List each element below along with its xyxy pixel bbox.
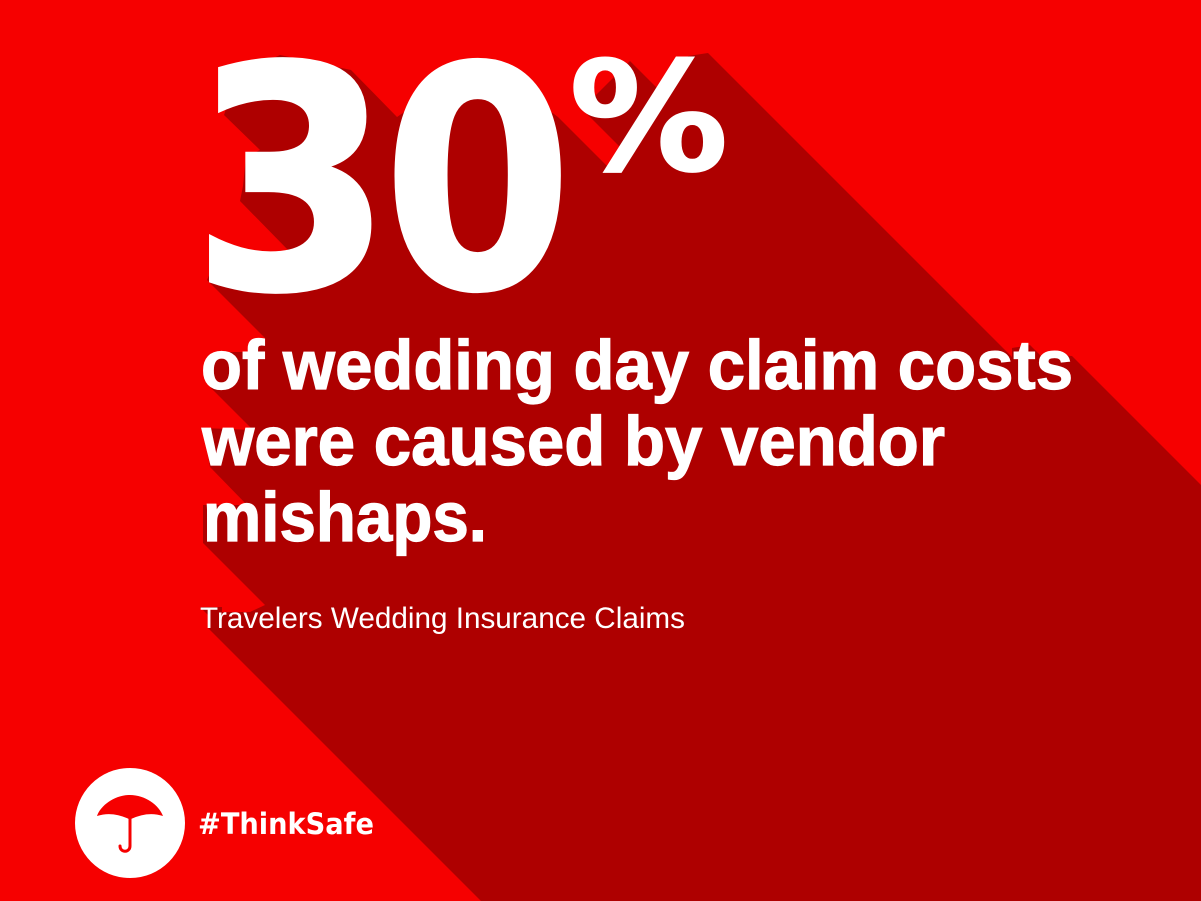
big statistic: 30% [191, 2, 728, 361]
big statistic: 30%: 3 [191, 2, 393, 361]
hashtag: #ThinkSafe [198, 807, 374, 841]
big statistic: 30%: 0 [382, 2, 573, 361]
headline text: of wedding day claim costs [201, 326, 1073, 404]
source line: Travelers Wedding Insurance Claims [200, 602, 685, 635]
big statistic: 30%: % [569, 29, 728, 206]
long diagonal shadow [200, 53, 1201, 901]
headline text: mishaps. [203, 478, 487, 556]
icon: umbrella logo in white circle [75, 768, 185, 878]
headline text [201, 326, 1073, 556]
headline text: were caused by vendor [201, 402, 945, 480]
